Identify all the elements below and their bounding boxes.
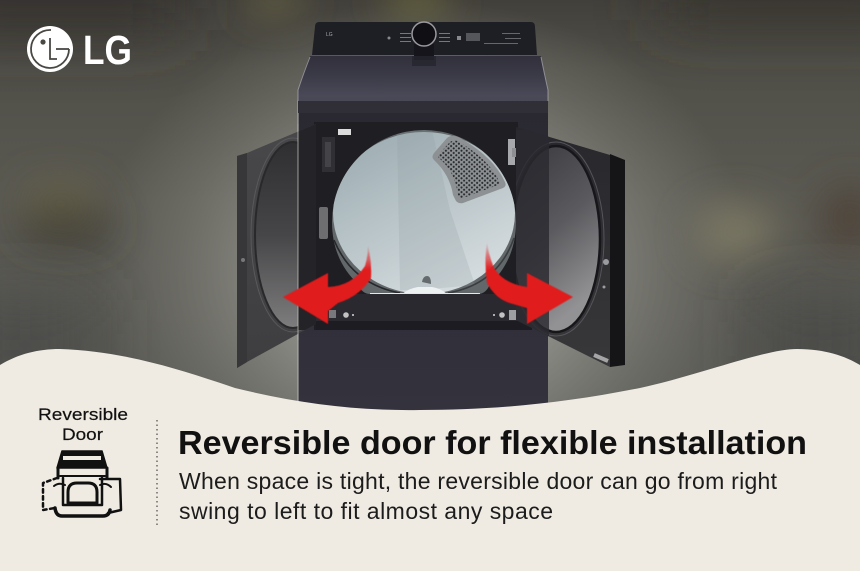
dryer lid [298, 56, 548, 113]
door edge [610, 154, 625, 367]
dotted divider [156, 420, 158, 527]
right door window [516, 136, 604, 336]
door opening frame [314, 122, 518, 330]
drum interior [330, 128, 520, 298]
lint filter grille [432, 136, 506, 203]
body text [179, 468, 778, 524]
red arrow: right [486, 243, 573, 324]
logo wordmark: LG [83, 27, 132, 73]
lower door sill [316, 294, 532, 330]
right open door [508, 127, 625, 367]
right hinge [508, 139, 523, 165]
left door window [250, 124, 316, 332]
icon label: Door [62, 425, 103, 444]
control panel: LG [326, 32, 333, 38]
icon label: Reversible [38, 405, 128, 424]
logo emblem [27, 26, 73, 72]
control dial [414, 44, 434, 60]
dryer body [298, 110, 548, 415]
body text: When space is tight, the reversible door can go from right [179, 468, 778, 494]
dryer [298, 22, 548, 415]
red arrow: left [283, 246, 371, 324]
left open door [237, 124, 316, 368]
icon: reversible door dryer [43, 451, 121, 516]
control panel [312, 22, 537, 66]
wavy cream footer panel [0, 349, 860, 571]
body text: swing to left to fit almost any space [179, 498, 553, 524]
heading: Reversible door for flexible installation [178, 424, 807, 461]
LG logo [27, 26, 132, 73]
left hinge slot [319, 207, 328, 239]
icon label [38, 405, 128, 444]
